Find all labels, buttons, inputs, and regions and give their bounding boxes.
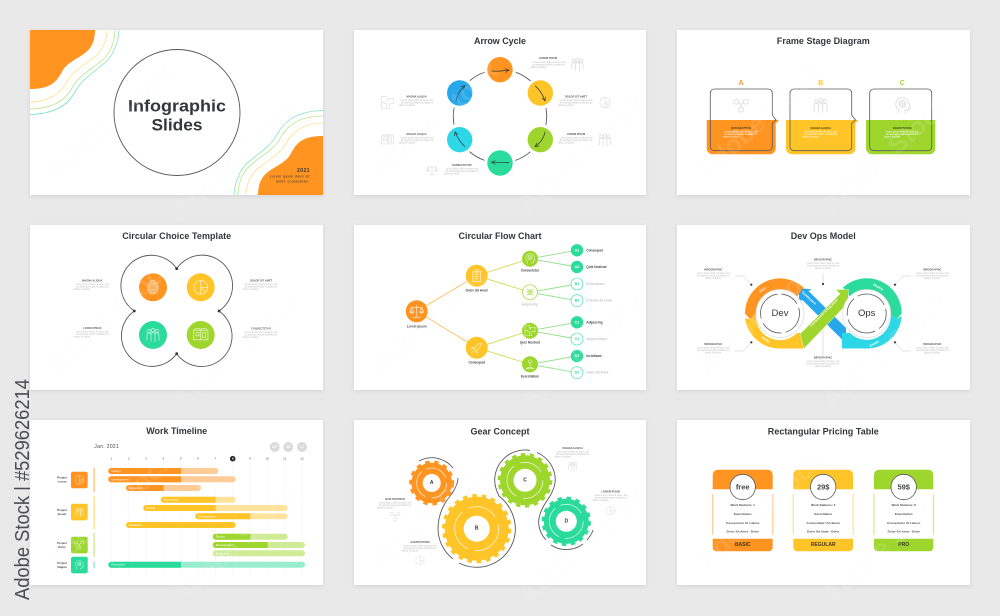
project lorem: Development [112,477,129,481]
project magna: Promotion [112,563,125,567]
text: bottom: labore et dolore [815,365,832,368]
stage A: labore et dolore [723,135,740,138]
panel: circular flow chart [354,225,646,390]
cover caption: 2021 [297,168,310,174]
text: lorem ipsum: labore et dolore [531,66,548,69]
text: dolor sit amet: Lorem ipsum dolor sit amet, sed [560,99,593,102]
band labels: Build [761,336,770,344]
month axis: 11 [283,457,287,461]
blob: top left corner [30,30,119,114]
blob: bottom right corner [234,110,323,195]
text: magna aliqua [399,94,434,107]
card: pro [873,470,934,551]
text: consectetur: do eiusmod tempor incididunt ut [245,334,278,336]
project ipsum: Marketing [129,523,142,527]
project dolor: Project [57,541,67,545]
card: basic [712,470,774,551]
text: lower right: INFOGRAPHIC [923,342,942,346]
month axis: 3 [145,457,147,461]
text: top: INFOGRAPHIC [814,258,832,262]
text: lorem ipsum 2: LOREM IPSUM [567,132,585,136]
text: lorem ipsum 2: labore et dolore [558,141,575,144]
stage A [707,80,779,154]
stage B: labore et dolore [803,135,819,138]
stage C: labore et dolore [884,135,901,138]
text: lower right: do eiusmod tempor incididunt ut [916,349,949,352]
project magna [57,557,305,573]
text: upper left: labore et dolore [705,277,722,280]
gear outline [419,450,593,567]
card: pro: Consectetur Ut Labore [887,521,921,525]
text: exercitation: Lorem ipsum dolor sit amet, sed [404,544,437,547]
level three nodes: C1 [575,320,579,324]
text: bottom [807,356,840,368]
project ipsum: Design [146,506,156,510]
ops hub [843,290,891,338]
text: magna aliqua [555,446,590,458]
title circle: Slides [152,116,202,134]
text: magna aliqua: MAGNA ALIQUA [407,94,427,98]
text: exercitation: do eiusmod tempor incididunt ut [404,547,437,550]
month axis: 7 [214,457,216,461]
band labels: Feedback [827,327,841,340]
card: basic: Dolor Sit Amet - Dolor [727,530,760,534]
watermark: diagonal stock marks: Adobe Stock [41,55,179,184]
heading: Circular Flow Chart [458,231,542,241]
panel: dev ops model [677,225,970,390]
text: top: Lorem ipsum dolor sit amet, sed [807,262,840,265]
level three nodes: Ut Enim Ad Unim [586,299,612,303]
card: regular: 29$ [817,482,830,492]
text: exercitation: labore et dolore [402,549,419,552]
gear A [410,462,453,504]
text: lorem ipsum: do eiusmod tempor incididunt ut [76,333,109,336]
stage C: do eiusmod tempor incididunt ut [886,133,919,136]
level two nodes [520,251,540,378]
watermark: diagonal stock marks: Adobe Stock [513,480,651,609]
month axis: 12 [300,457,304,461]
level three nodes: Quis Nostrud [586,265,607,269]
project lorem: Design [112,469,121,473]
watermark: diagonal stock marks: Adobe Stock [691,250,829,379]
level three nodes [571,244,612,379]
text: quis nostrud: do eiusmod tempor incididunt ut [379,504,412,507]
cover caption [270,168,310,184]
panel: infographic slides cover [30,30,323,195]
text: consectetur: CONSECTETUR [452,163,472,167]
text: magna aliqua: Lorem ipsum dolor sit amet, sed [556,450,590,453]
watermark: diagonal stock marks: Adobe Stock [816,480,954,609]
band labels: Deploy [873,283,884,292]
project lorem: Project [57,476,67,480]
project lorem: Lorem [58,480,67,484]
root node: Lorem Ipsum [407,325,427,329]
level three nodes: A1 [575,248,579,252]
text: lorem ipsum: labore et dolore [74,335,91,338]
stage B [786,80,858,154]
text: magna aliqua: Lorem ipsum dolor sit amet, sed [401,99,434,102]
side strips [93,468,95,568]
level three nodes: Consequat [586,248,604,252]
text: bottom: do eiusmod tempor incididunt ut [807,362,840,366]
text: magna aliqua: MAGNA ALIQUA [82,278,103,282]
text: consectetur: labore et dolore [243,336,260,339]
heading: Arrow Cycle [474,36,526,46]
level three nodes: Dolor Sit Amet [586,371,609,375]
band labels: Continuous [801,290,817,306]
text: consectetur: Lorem ipsum dolor sit amet, sed [245,331,278,334]
text: top: labore et dolore [815,267,832,270]
level three nodes: D1 [575,354,579,358]
level one nodes: Consequat [468,361,486,365]
text: lorem ipsum: do eiusmod tempor incididunt ut [533,64,566,66]
text: lower left: Lorem ipsum dolor sit amet, sed [697,346,730,349]
text: lower left: INFOGRAPHIC [704,342,723,346]
card: pro: Dolor Sit Amet - Dolor [888,530,921,534]
text: lorem ipsum: Lorem ipsum dolor sit amet, sed [76,330,109,333]
heading: Gear Concept [470,426,530,436]
text: lorem ipsum 2 [558,132,593,144]
month axis [110,456,304,576]
heading: Work Timeline [146,426,207,436]
watermark: diagonal stock marks: Adobe Stock [691,55,829,184]
card: regular: Work Stations: 3 [811,503,836,507]
month axis: 9 [249,457,251,461]
watermark: diagonal stock marks: Adobe Stock [41,250,179,379]
project dolor: Dolor [58,545,67,549]
watermark: vertical stock id: Adobe Stock | #529626214 [12,379,34,600]
month label: Jan. 2021 [94,444,119,450]
title circle: Infographic [128,96,226,116]
card: regular: Consectetur Ut Labore [807,521,840,525]
text: upper right: labore et dolore [924,277,941,280]
panel: work timeline [30,420,323,585]
text: lorem ipsum: Lorem ipsum dolor sit amet, sed [533,61,566,64]
band labels: Plan [759,286,767,293]
panel: circular choice template [30,225,323,390]
card: regular: Exercitation [814,512,832,516]
cycle nodes with arrows [447,57,553,176]
watermark: diagonal stock marks: Adobe Stock [816,285,954,414]
watermark: diagonal stock marks: Adobe Stock [366,250,504,379]
stage B: Lorem ipsum dolor sit amet, sed [804,131,838,134]
text: magna aliqua 2: do eiusmod tempor incididunt ut [401,139,434,142]
dev hub: Dev [772,308,789,319]
text: lower right: labore et dolore [924,351,941,354]
stage B: B [818,80,823,87]
stage A: QUIS NOSTRUD [731,126,751,130]
text: magna aliqua 2: MAGNA ALIQUA [407,132,427,136]
card: regular: Dolor Sit Amet - Dolor [807,530,840,534]
text: bottom: Lorem ipsum dolor sit amet, sed [807,360,840,363]
text: magna aliqua [74,278,109,291]
card: pro: Work Stations: 8 [892,503,916,507]
project lorem: Marketing [129,486,142,490]
text: top [807,258,840,270]
cycle ring [453,70,547,163]
level one nodes [466,265,489,365]
project lorem [57,468,236,491]
text: magna aliqua 2: labore et dolore [399,141,416,144]
panel: arrow cycle [354,30,646,195]
watermark: diagonal stock marks: Adobe Stock [816,90,954,219]
leader lines with dots [735,274,911,355]
text: top: do eiusmod tempor incididunt ut [807,264,840,268]
text: quis nostrud: QUIS NOSTRUD [385,497,405,501]
level three nodes: Magna Aliqua [586,337,607,341]
text: consectetur [444,163,479,175]
text: magna aliqua: labore et dolore [399,104,416,107]
card: pro: 59$ [897,482,911,492]
text: upper right [916,268,949,280]
stage A: Lorem ipsum dolor sit amet, sed [725,131,758,134]
band: create [842,314,902,349]
level two nodes: Quis Nostrud [520,340,540,344]
project dolor: Marketing [216,551,229,555]
text: lorem ipsum 2: Lorem ipsum dolor sit amet, sed [560,136,593,139]
project magna: Magna [57,565,67,569]
project dolor: Development [216,543,233,547]
text: magna aliqua: labore et dolore [555,455,571,458]
watermark: diagonal stock marks: Adobe Stock [513,285,651,414]
watermark: diagonal stock marks: Adobe Stock [366,445,504,574]
gear D [543,498,590,545]
band: deploy [843,278,902,320]
text: upper right: INFOGRAPHIC [923,268,942,272]
heading: Circular Choice Template [122,231,231,241]
text: lorem ipsum 2: do eiusmod tempor incididunt ut [560,139,593,142]
card: basic: free [736,482,750,492]
text: upper right: do eiusmod tempor incididunt ut [916,274,949,278]
band: feedback and continuous arrow [799,288,846,344]
card: basic: BASIC [735,542,751,548]
stage C: Lorem ipsum dolor sit amet, sed [886,131,919,134]
text: dolor sit amet: DOLOR SIT AMET [565,94,587,98]
card: basic: Exercitation [734,512,752,516]
text: upper left: INFOGRAPHIC [704,268,723,272]
stage C: C [900,80,905,87]
panel: gear concept [354,420,646,585]
text: lorem ipsum: LOREM IPSUM [539,56,557,60]
stage A: A [738,80,744,87]
level three nodes: A2 [575,265,579,269]
heading: Dev Ops Model [791,231,856,241]
text: consectetur [243,326,278,339]
level three nodes: B2 [575,299,579,303]
level two nodes: Consectetur [521,269,540,273]
text: magna aliqua: do eiusmod tempor incididunt ut [76,286,109,288]
card: pro: PRO [898,542,909,548]
text: dolor sit amet [243,278,278,291]
card: basic: Work Stations: 1 [731,503,755,507]
text: magna aliqua 2 [399,132,434,144]
title circle [114,50,240,176]
text: dolor sit amet: do eiusmod tempor incididunt ut [560,102,593,104]
project ipsum [57,497,288,528]
text: dolor sit amet: Lorem ipsum dolor sit amet, sed [245,283,278,286]
text: lorem ipsum [531,56,566,69]
heading: Frame Stage Diagram [777,36,870,46]
level one nodes: Dolor Sit Amet [466,288,489,292]
text: exercitation [402,540,437,552]
text: magna aliqua: do eiusmod tempor incididunt ut [401,102,434,104]
text: dolor sit amet: labore et dolore [243,288,260,291]
text: quis nostrud: labore et dolore [377,507,394,510]
project magna: Project [57,561,67,565]
text: lower right: Lorem ipsum dolor sit amet, sed [916,346,949,349]
project ipsum: Project [57,508,67,512]
team avatars: AP [272,445,278,449]
heading: Rectangular Pricing Table [768,426,879,436]
root node [406,300,428,329]
card: regular: REGULAR [811,542,836,548]
gear C: C [523,477,527,483]
card: basic: Consectetur Ut Labore [726,521,760,525]
ops hub: Ops [858,308,876,319]
level three nodes: D2 [575,371,579,375]
icons: light outline [382,58,611,175]
month axis: 10 [266,457,269,461]
text: consectetur: labore et dolore [444,172,461,175]
panel: rectangular pricing table [677,420,970,585]
stage C: EXERCITATION [893,126,912,130]
text: lower left [697,342,730,354]
watermark: diagonal stock marks: Adobe Stock [691,445,829,574]
text: upper left [697,268,730,280]
band labels [759,283,884,348]
level two nodes: Exercitation [521,374,539,378]
dev hub [756,290,804,338]
text: upper right: Lorem ipsum dolor sit amet, sed [916,272,949,275]
gear B: B [475,526,479,532]
text: dolor sit amet [558,94,593,107]
project ipsum: Ipsum [58,512,67,516]
band: plan [745,278,804,320]
text: magna aliqua: Lorem ipsum dolor sit amet, sed [76,283,109,286]
text: lower left: do eiusmod tempor incididunt ut [697,349,730,352]
text: upper left: do eiusmod tempor incididunt ut [697,274,730,278]
text: quis nostrud: Lorem ipsum dolor sit amet, sed [379,502,412,505]
text: magna aliqua: MAGNA ALIQUA [563,446,583,450]
month axis: 2 [128,457,130,461]
band: continuous integration arrow [800,290,848,348]
text: lorem ipsum: LOREM IPSUM [602,490,620,494]
stage A: do eiusmod tempor incididunt ut [725,133,758,136]
stage B: MAGNA ALIQUA [811,126,831,130]
text: dolor sit amet: labore et dolore [558,104,575,107]
text: consectetur: Lorem ipsum dolor sit amet, sed [446,167,479,170]
watermark: diagonal stock marks: Adobe Stock [41,445,179,574]
choice circles with icons [139,273,215,349]
watermark: diagonal stock marks: Adobe Stock [166,480,304,609]
text: dolor sit amet: do eiusmod tempor incididunt ut [245,286,278,288]
watermark: diagonal stock marks: Adobe Stock [166,95,304,224]
project ipsum: Development [198,514,216,518]
text: dolor sit amet: DOLOR SIT AMET [250,278,272,282]
level three nodes: Adipiscing [586,320,603,324]
text: lorem ipsum: LOREM IPSUM [83,326,101,330]
cover caption: Lorem ipsum dolor sit [270,174,310,178]
icons: light outline [390,462,615,565]
gear C [499,454,551,506]
watermark: diagonal stock marks: Adobe Stock [366,55,504,184]
level three nodes: Exercitation [586,282,605,286]
level three nodes: Incididunt [586,354,602,358]
card: pro: Exercitation [895,512,913,516]
month axis: 4 [162,457,164,461]
watermark: diagonal stock marks: Adobe Stock [166,285,304,414]
gear D: D [564,518,568,524]
gear A: A [430,480,434,486]
cover caption: amet, consectetur. [276,180,310,184]
text: lorem ipsum: labore et dolore [593,499,609,502]
project dolor [57,534,305,556]
project dolor: Design [216,535,225,539]
text: lorem ipsum [74,326,109,338]
text: exercitation: EXERCITATION [411,540,430,544]
month axis: 6 [197,457,199,461]
band: build [745,314,804,349]
text: bottom: INFOGRAPHIC [814,356,832,360]
level three nodes: C2 [575,337,579,341]
stage B: do eiusmod tempor incididunt ut [804,133,837,136]
card: regular [793,470,854,551]
text: lorem ipsum: Lorem ipsum dolor sit amet, sed [594,494,628,497]
team avatars: LI [300,445,304,449]
text: quis nostrud [377,497,412,510]
panel: frame stage diagram [677,30,970,195]
gear B [444,496,510,562]
text: magna aliqua: do eiusmod tempor incididunt ut [556,453,589,456]
level three nodes: B1 [575,282,579,286]
text: lorem ipsum [593,490,628,502]
clover outline with dots [121,255,233,367]
level two nodes: Adipiscing [522,303,538,307]
watermark: diagonal stock marks: Adobe Stock [513,90,651,219]
team avatars [270,442,307,452]
text: upper left: Lorem ipsum dolor sit amet, sed [697,272,730,275]
project ipsum: Accounting [164,498,178,502]
month axis: 5 [180,457,182,461]
band labels: Create [869,339,880,348]
text: magna aliqua: labore et dolore [74,288,91,291]
team avatars: JD [286,445,291,449]
band labels: Continuous Integration [809,298,839,328]
text: lower right [916,342,949,354]
text: lorem ipsum: do eiusmod tempor incididunt ut [594,496,627,500]
text: consectetur: do eiusmod tempor incididunt ut [446,170,479,173]
text: magna aliqua 2: Lorem ipsum dolor sit amet, sed [401,136,434,139]
connectors [417,250,577,373]
text: lower left: labore et dolore [705,351,722,354]
stage C [866,80,935,154]
month axis: 8 [232,457,234,461]
text: consectetur: CONSECTETUR [251,326,271,330]
month axis: 1 [110,457,112,461]
